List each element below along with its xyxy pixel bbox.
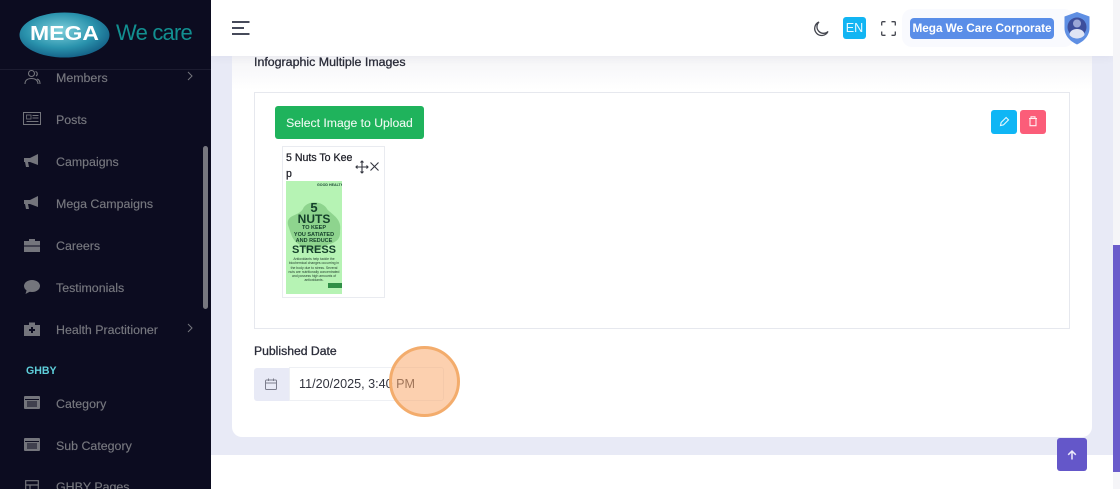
thumbnail headline: AND REDUCE	[296, 238, 332, 244]
form card	[232, 40, 1092, 437]
section label: ghby: GHBY	[26, 365, 57, 377]
heading: infographic multiple images: Infographic Multiple Images	[254, 55, 406, 69]
date field: 11/20/2025, 3:40 PM	[299, 377, 415, 391]
logo oval	[20, 12, 110, 58]
menu: careers	[24, 239, 100, 253]
menu: mega campaigns: Mega Campaigns	[56, 197, 153, 211]
image title	[286, 152, 352, 180]
menu: testimonials	[24, 280, 124, 295]
user badge: Mega We Care Corporate	[912, 21, 1051, 35]
upload panel	[254, 92, 1070, 329]
menu: sub category: Sub Category	[56, 439, 132, 453]
menu: health practitioner: Health Practitioner	[56, 323, 158, 337]
icon: close	[370, 162, 379, 171]
thumbnail body text: Antioxidants help tackle the biochemical changes occurring in the body due to stress. Several nuts are nutritionally concentrated and possess high amounts of antioxidants.	[289, 257, 339, 282]
button: edit	[991, 110, 1017, 134]
menu: posts: Posts	[56, 113, 87, 127]
user badge	[910, 18, 1054, 39]
menu: members: Members	[56, 71, 108, 85]
click highlight circle	[389, 346, 460, 417]
uploaded image tile	[282, 146, 385, 298]
thumbnail: 5 nuts infographic	[286, 181, 342, 294]
thumbnail headline	[292, 200, 336, 256]
logo	[0, 0, 211, 70]
menu: testimonials: Testimonials	[56, 281, 124, 295]
page scrollbar	[1113, 0, 1120, 489]
logo text mega: MEGA	[30, 23, 99, 45]
scroll-to-top button	[1057, 438, 1087, 471]
sidebar scrollbar	[203, 146, 208, 309]
date input	[254, 367, 415, 401]
icon: moon	[814, 21, 828, 36]
menu: posts	[23, 112, 87, 127]
button: select image to upload	[275, 106, 424, 139]
menu: category: Category	[56, 397, 106, 411]
sidebar	[0, 0, 211, 489]
user pill background	[902, 9, 1074, 47]
scrollbar thumb	[1113, 245, 1120, 472]
menu: campaigns: Campaigns	[56, 155, 119, 169]
language badge: EN	[846, 21, 863, 35]
thumbnail headline: YOU SATIATED	[294, 232, 334, 238]
thumbnail headline: 5	[310, 200, 318, 215]
button: delete	[1020, 110, 1046, 134]
thumbnail tag	[328, 283, 342, 288]
page background	[211, 56, 1113, 455]
language badge	[843, 17, 866, 39]
menu: members	[24, 70, 193, 85]
menu: careers: Careers	[56, 239, 100, 253]
menu: campaigns	[24, 154, 119, 169]
thumbnail blob	[288, 202, 340, 251]
image title: p	[286, 168, 292, 180]
logo text we care: We care	[116, 20, 192, 45]
icon: fullscreen	[881, 21, 896, 36]
button: select image to upload: Select Image to Upload	[286, 116, 413, 130]
thumbnail headline: STRESS	[292, 244, 336, 256]
menu: health practitioner	[24, 322, 193, 337]
thumbnail headline: TO KEEP	[302, 225, 326, 231]
icon: user shield avatar	[1064, 12, 1090, 44]
header bar	[211, 0, 1113, 56]
image title: 5 Nuts To Kee	[286, 152, 352, 164]
menu: category	[24, 396, 106, 411]
menu: sub category	[24, 438, 132, 453]
icon: hamburger menu	[232, 21, 250, 35]
date field	[289, 367, 444, 401]
label: published date: Published Date	[254, 344, 337, 358]
calendar addon	[254, 368, 289, 401]
thumbnail headline: NUTS	[298, 212, 330, 226]
icon: move	[355, 160, 369, 174]
